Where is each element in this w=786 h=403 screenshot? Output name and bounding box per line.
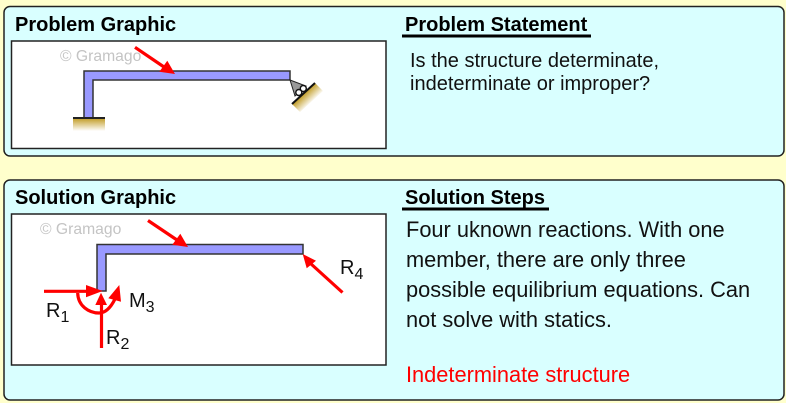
watermark: © Gramago [40, 221, 122, 238]
label R1: 1 [60, 309, 69, 326]
label R1: R [46, 300, 60, 322]
steps text: possible equilibrium equations. Can [406, 277, 750, 302]
label R4: R [340, 257, 354, 279]
frame member [84, 71, 290, 118]
panel: problem [4, 6, 784, 156]
label R2: 2 [120, 336, 129, 353]
statement text: indeterminate or improper? [410, 73, 650, 95]
panel: solution [4, 180, 784, 400]
roller support [290, 80, 323, 112]
steps text: Four uknown reactions. With one [406, 217, 725, 242]
load arrow [148, 220, 188, 247]
label R2: R [106, 327, 120, 349]
label M3: 3 [146, 299, 155, 316]
heading: Problem Statement: Problem Statement [405, 14, 588, 36]
frame member [97, 244, 303, 291]
fixed support [73, 118, 105, 131]
solution graphic box [12, 214, 386, 365]
reaction R4 arrow [303, 254, 342, 292]
reaction R1 arrow [44, 285, 103, 297]
heading: Problem Graphic: Problem Graphic [15, 14, 176, 36]
statement text: Is the structure determinate, [410, 50, 659, 72]
conclusion: Indeterminate structure [406, 362, 630, 387]
panel: solution steps [402, 187, 750, 387]
heading: Solution Steps: Solution Steps [405, 187, 545, 209]
panel: problem statement [402, 14, 659, 95]
watermark: © Gramago [60, 48, 142, 65]
label R4: 4 [354, 266, 363, 283]
heading: Solution Graphic: Solution Graphic [15, 187, 176, 209]
steps text: member, there are only three [406, 247, 686, 272]
moment M3 arrow [78, 285, 121, 313]
problem graphic box [12, 41, 386, 148]
label M3: M [129, 290, 146, 312]
reaction R2 arrow [95, 293, 107, 348]
steps text: not solve with statics. [406, 307, 612, 332]
load arrow [135, 47, 175, 74]
